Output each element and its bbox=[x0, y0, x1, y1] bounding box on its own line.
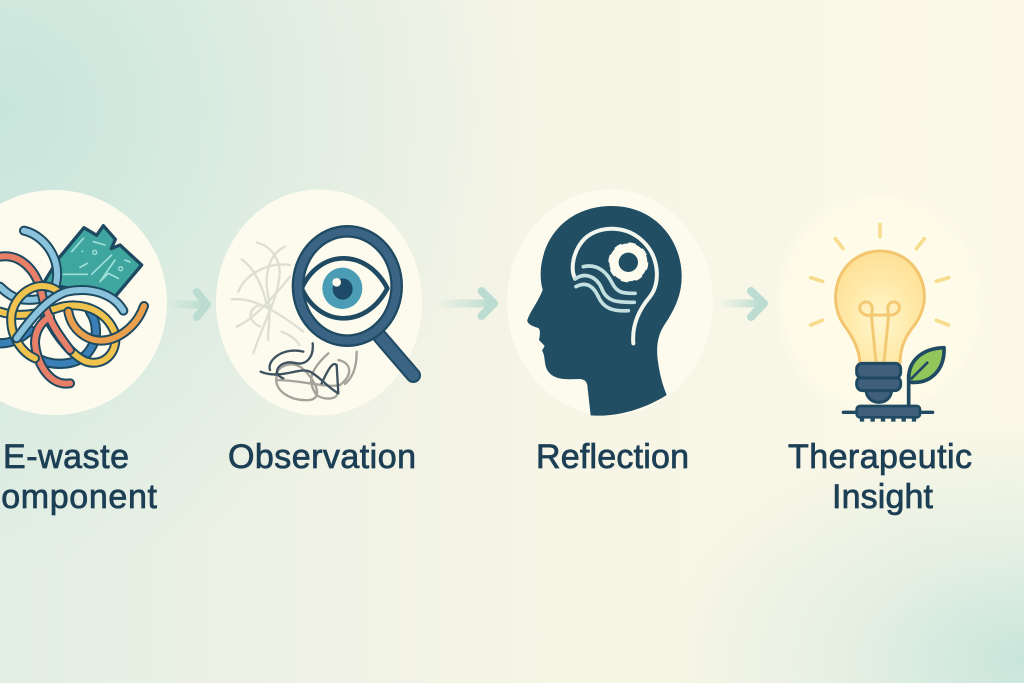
gear bbox=[611, 245, 646, 280]
bulb glass bbox=[836, 251, 924, 363]
panel: e-waste component bbox=[0, 190, 167, 516]
arrow: second step bbox=[438, 291, 494, 316]
wire: light blue top bbox=[0, 231, 57, 300]
wire: red to orange bbox=[68, 306, 144, 341]
light rays bbox=[811, 224, 949, 325]
circle backdrop: observation bbox=[216, 190, 422, 416]
head silhouette bbox=[527, 206, 682, 416]
arrow: first step bbox=[168, 292, 207, 317]
brain outline bbox=[573, 229, 657, 343]
panel: observation bbox=[216, 190, 422, 476]
faint tangled threads bbox=[232, 243, 303, 353]
wire: yellow bbox=[0, 305, 115, 363]
icon: head with gear and waves bbox=[527, 206, 682, 416]
leaf bbox=[909, 348, 944, 410]
icon: light bulb with leaf bbox=[811, 224, 949, 422]
wire: light blue wave bbox=[17, 290, 123, 338]
icon: tangled wires and circuit board bbox=[0, 226, 144, 384]
label: e-waste component: E-waste bbox=[3, 438, 129, 476]
circle backdrop: insight bbox=[772, 186, 988, 418]
circuit board bbox=[43, 226, 142, 297]
panel: reflection bbox=[507, 190, 713, 476]
wire: dark blue bbox=[0, 312, 96, 364]
wire: red bbox=[0, 256, 70, 384]
magnifier handle bbox=[380, 337, 413, 375]
circle backdrop: reflection bbox=[507, 190, 713, 416]
wire: yellow loop bbox=[11, 286, 58, 358]
grey tangled thread bbox=[275, 352, 357, 400]
magnifier ring bbox=[298, 231, 397, 341]
icon: magnifier, eye and threads bbox=[232, 231, 413, 400]
panel: therapeutic insight bbox=[772, 186, 988, 516]
eye bbox=[302, 258, 387, 318]
filament bbox=[860, 302, 900, 363]
label: reflection: Reflection bbox=[536, 438, 689, 476]
thought waves bbox=[575, 266, 635, 311]
bulb screw base bbox=[857, 363, 901, 402]
arrow: third step bbox=[722, 291, 764, 317]
label: therapeutic insight: Insight bbox=[832, 478, 934, 516]
label: observation: Observation bbox=[228, 438, 416, 476]
circle backdrop: e-waste bbox=[0, 190, 167, 415]
circuit chip base bbox=[843, 406, 933, 422]
dark tangled thread bbox=[261, 343, 338, 393]
label: therapeutic insight: Therapeutic bbox=[788, 438, 972, 476]
